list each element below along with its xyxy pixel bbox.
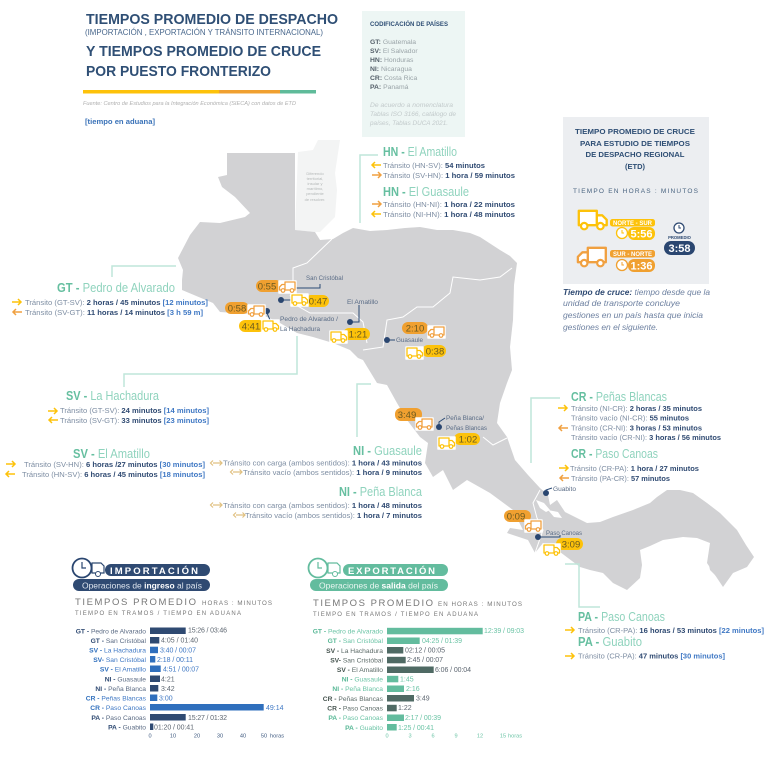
map time: 2:10: [402, 322, 445, 338]
export header: [308, 558, 448, 591]
bar chart: import: 4:51 / 00:07: [163, 666, 199, 674]
average time: PROMEDIO: [668, 235, 692, 240]
panel: regional crossing time: DE DESPACHO REGIONAL: [586, 150, 685, 159]
icon: south-north truck: [578, 248, 606, 266]
export subtitle: EN HORAS : MINUTOS: [438, 601, 522, 608]
panel: country codes: De acuerdo a nomenclatura: [370, 102, 453, 109]
bar chart: export: CR - Peñas Blancas: [323, 696, 384, 703]
disputed territory: [295, 140, 340, 232]
bar chart: import: PA - Paso Canoas: [91, 715, 147, 722]
block: HN El Amatillo: Tránsito (SV-HN): 1 hora / 59 minutos: [383, 171, 515, 180]
south-north time: 1:36: [630, 260, 653, 272]
bar chart: import: 49:14: [266, 705, 284, 712]
bar chart: export: horas: [508, 734, 522, 740]
block: SV El Amatillo: Tránsito (HN-SV): 6 horas / 45 minutos [18 minutos]: [22, 470, 205, 479]
map border post markers: Paso Canoas: [546, 530, 582, 537]
bar chart: export: 6: [431, 734, 435, 740]
block: PA Guabito: Tránsito (CR-PA): 47 minutos [30 minutos]: [578, 652, 725, 660]
bar chart: import: GT - Pedro de Alvarado: [76, 628, 146, 636]
bar chart: import: PA - Guabito: [108, 724, 146, 732]
map border post markers: Peñas Blancas: [446, 425, 487, 432]
map time: 0:38: 0:38: [426, 346, 444, 358]
block: HN El Amatillo: Tránsito (HN-SV): 54 minutos: [383, 161, 485, 170]
bar chart: import: CR - Peñas Blancas: [86, 696, 147, 702]
south-north time: [610, 250, 655, 272]
bar chart: export: 3: [408, 734, 412, 740]
import subtitle: TIEMPOS PROMEDIO: [75, 597, 196, 608]
map border post markers: Guabito: [553, 486, 576, 493]
map time: 0:47: [291, 294, 329, 308]
title: (IMPORTACIÓN , EXPORTACIÓN Y TRÁNSITO INTERNACIONAL): [85, 27, 323, 37]
bar chart: import: SV - La Hachadura: [89, 648, 146, 654]
bar chart: import: 15:26 / 03:46: [188, 628, 227, 634]
bar chart: export: 9: [454, 734, 458, 740]
bar chart: import: [76, 628, 284, 740]
disputed territory note: de resolver.: [305, 197, 325, 202]
map time: 1:02: 1:02: [459, 434, 477, 446]
block: GT Pedro de Alvarado: Tránsito (GT-SV): 2 horas / 45 minutos [12 minutos]: [25, 298, 208, 307]
block: CR Paso Canoas: CR - Paso Canoas: [571, 447, 658, 461]
disputed territory note: [305, 171, 325, 202]
disputed territory note: pendiente: [306, 191, 325, 196]
panel: country codes: países, Tablas DUCA 2021.: [369, 120, 448, 127]
icon: clock and truck: [72, 558, 104, 578]
bar chart: export: 02:12 / 00:05: [405, 648, 445, 654]
map time: 3:49: [395, 408, 433, 430]
import header: Operaciones de ingreso al país: [82, 580, 202, 590]
customs time legend: [tiempo en aduana]: [85, 117, 156, 126]
panel: regional crossing time: PARA ESTUDIO DE TIEMPOS: [580, 139, 690, 148]
panel: country codes: PA: Panamá: [370, 84, 409, 91]
bar chart: import: 3:42: [161, 686, 175, 693]
bar chart: import: 4:21: [161, 676, 175, 684]
bar chart: import: 2:18 / 00:11: [157, 657, 193, 664]
panel: country codes: CR: Costa Rica: [370, 75, 417, 82]
block: NI Peña Blanca: Tránsito vacío (ambos sentidos): 1 hora / 7 minutos: [245, 511, 422, 520]
map time: 3:09: 3:09: [562, 540, 580, 550]
block: CR Paso Canoas: Tránsito (CR-PA): 1 hora / 27 minutos: [570, 464, 699, 473]
bar chart: import: SV - El Amatillo: [100, 666, 146, 674]
crossing time definition: gestiones en un país hasta que inicia: [563, 311, 704, 320]
disputed territory note: Diferendo: [306, 171, 324, 176]
average time: [664, 223, 695, 255]
panel: country codes: CODIFICACIÓN DE PAÍSES: [370, 19, 449, 28]
land mass: [178, 153, 754, 590]
source: Fuente: Centro de Estudios para la Integración Económica (SIECA) con datos de ETD: [83, 101, 296, 107]
bar chart: import: SV- San Cristóbal: [93, 657, 147, 664]
export subtitle: [313, 598, 522, 618]
block: PA Guabito: PA - Guabito: [578, 635, 642, 649]
disputed territory note: marítimo,: [307, 186, 323, 191]
bar chart: export: 2:17 / 00:39: [405, 715, 441, 722]
block: CR Peñas Blancas: Tránsito (CR-NI): 3 horas / 53 minutos: [571, 424, 702, 432]
bar chart: export: [313, 628, 524, 740]
panel: regional crossing time: [563, 117, 709, 284]
bar chart: import: NI - Guasaule: [105, 676, 146, 684]
import header: [72, 558, 210, 591]
bar chart: export: 2:16: [406, 686, 420, 693]
export subtitle: TIEMPOS PROMEDIO: [313, 598, 433, 609]
block: CR Peñas Blancas: Tránsito (NI-CR): 2 horas / 35 minutos: [571, 404, 702, 413]
crossing time definition: [563, 288, 711, 332]
map time: 0:47: 0:47: [309, 296, 327, 308]
map time: 0:09: [504, 510, 542, 532]
block: CR Peñas Blancas: Tránsito vacío (NI-CR): 55 minutos: [571, 414, 689, 422]
bar chart: import: 50: [261, 734, 267, 740]
south-north time: SUR - NORTE: [613, 252, 652, 258]
bar chart: export: 1:22: [398, 705, 412, 712]
map border post markers: Guasaule: [396, 337, 423, 344]
panel: regional crossing time: TIEMPO EN HORAS : MINUTOS: [573, 188, 699, 195]
bar chart: export: 12: [477, 734, 483, 740]
panel: regional crossing time: (ETD): [625, 162, 645, 171]
map border post markers: [264, 275, 582, 540]
bar chart: import: 20: [194, 734, 200, 740]
block: NI Peña Blanca: [210, 485, 422, 520]
map border post markers: La Hachadura: [280, 326, 320, 333]
bar chart: export: PA - Guabito: [345, 725, 383, 732]
panel: country codes: GT: Guatemala: [370, 39, 416, 46]
block: PA Paso Canoas: Tránsito (CR-PA): 16 horas / 53 minutos [22 minutos]: [578, 626, 764, 635]
map of Central America: [178, 140, 754, 590]
block: HN El Guasaule: [372, 185, 515, 219]
block: SV La Hachadura: Tránsito (SV-GT): 33 minutos [23 minutos]: [60, 416, 209, 425]
map time: 0:58: [225, 302, 265, 317]
block: CR Peñas Blancas: [531, 390, 721, 463]
map border post markers: San Cristóbal: [306, 275, 343, 282]
map time: 1:21: [330, 328, 370, 343]
block: HN El Guasaule: Tránsito (NI-HN): 1 hora / 48 minutos: [383, 210, 515, 219]
block: GT Pedro de Alvarado: Tránsito (SV-GT): 11 horas / 14 minutos [3 h 59 m]: [25, 308, 203, 317]
title: TIEMPOS PROMEDIO DE DESPACHO: [86, 11, 338, 28]
disputed territory note: territorial,: [307, 176, 323, 181]
bar chart: import: 10: [170, 734, 176, 740]
bar chart: import: 0: [148, 734, 152, 740]
crossing time definition: Tiempo de cruce: tiempo desde que la: [563, 288, 711, 297]
block: PA Guabito: [565, 635, 725, 660]
bar chart: export: 2:45 / 00:07: [407, 657, 443, 664]
block: HN El Guasaule: Tránsito (HN-NI): 1 hora / 22 minutos: [383, 200, 515, 209]
bar chart: import: 01:20 / 00:41: [154, 724, 194, 732]
bar chart: import: 15:27 / 01:32: [188, 715, 227, 722]
bar chart: export: 15: [500, 734, 506, 740]
north-south time: 5:56: [630, 228, 653, 240]
panel: country codes: HN: Honduras: [370, 57, 414, 64]
panel: country codes: SV: El Salvador: [370, 48, 418, 55]
map time: 0:55: 0:55: [258, 282, 276, 292]
block: HN El Guasaule: HN - El Guasaule: [383, 185, 469, 199]
block: CR Peñas Blancas: CR - Peñas Blancas: [571, 390, 667, 404]
map border post markers: Pedro de Alvarado /: [280, 316, 338, 323]
bar chart: import: NI - Peña Blanca: [95, 686, 146, 693]
bar chart: export: PA - Paso Canoas: [328, 715, 384, 722]
block: PA Paso Canoas: PA - Paso Canoas: [578, 610, 665, 624]
bar chart: export: 12:39 / 09:03: [484, 628, 524, 635]
import subtitle: TIEMPO EN TRAMOS / TIEMPO EN ADUANA: [75, 611, 241, 617]
block: GT Pedro de Alvarado: [12, 266, 208, 317]
bar chart: import: 4:05 / 01:40: [161, 638, 198, 644]
import header: IMPORTACIÓN: [110, 565, 198, 577]
map time: 4:41: 4:41: [242, 322, 260, 332]
block: CR Paso Canoas: [559, 447, 699, 483]
bar chart: export: 0: [385, 734, 389, 740]
block: SV El Amatillo: SV - El Amatillo: [73, 447, 150, 461]
block: SV La Hachadura: Tránsito (GT-SV): 24 minutos [14 minutos]: [60, 406, 209, 415]
bar chart: import: 3:00: [159, 696, 173, 702]
map time: 3:09: [543, 538, 583, 556]
bar chart: import: 30: [217, 734, 223, 740]
block: HN El Amatillo: HN - El Amatillo: [383, 145, 457, 159]
map time: 2:10: 2:10: [406, 324, 424, 334]
bar chart: export: SV - La Hachadura: [326, 648, 383, 655]
map time: 1:21: 1:21: [349, 330, 367, 340]
block: NI Peña Blanca: NI - Peña Blanca: [339, 485, 422, 499]
block: PA Paso Canoas: [565, 564, 764, 635]
export header: EXPORTACIÓN: [348, 565, 435, 577]
disputed territory note: insular y: [308, 181, 322, 186]
map border post markers: El Amatillo: [347, 299, 378, 306]
bar chart: export: SV - El Amatillo: [337, 667, 383, 674]
bar chart: export: CR - Paso Canoas: [327, 706, 384, 712]
panel: regional crossing time: TIEMPO PROMEDIO DE CRUCE: [575, 127, 695, 136]
map time: 0:38: [406, 345, 446, 359]
bar chart: export: 04:25 / 01:39: [422, 638, 462, 645]
map time: 3:49: 3:49: [398, 410, 416, 421]
title: Y TIEMPOS PROMEDIO DE CRUCE: [86, 43, 321, 60]
block: NI Guasaule: Tránsito con carga (ambos sentidos): 1 hora / 43 minutos: [223, 458, 422, 468]
export subtitle: TIEMPO EN TRAMOS / TIEMPO EN ADUANA: [313, 612, 478, 618]
bar chart: import: 40: [240, 734, 246, 740]
bar chart: export: 1:25 / 00:41: [398, 725, 434, 732]
bar chart: import: GT - San Cristóbal: [91, 638, 147, 645]
map time: 1:02: [438, 433, 480, 449]
north-south time: [610, 219, 655, 240]
import subtitle: [75, 597, 272, 617]
title colour rule: [83, 90, 316, 94]
title: POR PUESTO FRONTERIZO: [86, 63, 271, 80]
bar chart: export: NI - Guasaule: [342, 676, 383, 684]
map time: 0:58: 0:58: [228, 304, 246, 314]
panel: country codes: [362, 11, 465, 137]
block: SV El Amatillo: Tránsito (SV-HN): 6 horas /27 minutos [30 minutos]: [24, 460, 205, 469]
block: SV El Amatillo: [6, 447, 205, 479]
bar chart: import: horas: [270, 734, 284, 740]
bar chart: import: 3:40 / 00:07: [160, 648, 196, 654]
bar chart: export: NI - Peña Blanca: [332, 686, 383, 693]
bar chart: export: 6:06 / 00:04: [435, 667, 471, 674]
north-south time: NORTE - SUR: [613, 221, 653, 227]
crossing time definition: unidad de transporte concluye: [563, 299, 681, 308]
bar chart: import: CR - Paso Canoas: [90, 705, 147, 712]
panel: country codes: NI: Nicaragua: [370, 66, 412, 73]
block: CR Paso Canoas: Tránsito (PA-CR): 57 minutos: [571, 474, 670, 483]
block: HN El Amatillo: [360, 145, 515, 223]
map border post markers: Peña Blanca/: [446, 415, 484, 422]
block: GT Pedro de Alvarado: GT - Pedro de Alvarado: [57, 281, 175, 295]
average time: 3:58: [668, 243, 691, 255]
block: CR Peñas Blancas: Tránsito vacío (CR-NI): 3 horas / 56 minutos: [571, 433, 721, 442]
export header: Operaciones de salida del país: [319, 580, 438, 590]
bar chart: export: SV- San Cristóbal: [330, 658, 384, 664]
block: SV La Hachadura: [48, 336, 297, 425]
bar chart: export: GT - San Cristóbal: [328, 638, 384, 645]
bar chart: export: 3:49: [416, 696, 430, 702]
import subtitle: HORAS : MINUTOS: [202, 600, 272, 607]
block: SV La Hachadura: SV - La Hachadura: [66, 389, 159, 403]
map time: 4:41: [239, 320, 279, 332]
panel: country codes: Tablas ISO 3166, catálogo de: [370, 111, 456, 118]
icon: north-south truck: [579, 211, 607, 229]
block: NI Guasaule: [210, 384, 422, 477]
block: NI Guasaule: Tránsito vacío (ambos sentidos): 1 hora / 9 minutos: [243, 468, 422, 477]
map time: 0:55: [256, 280, 296, 293]
crossing time definition: gestiones en el siguiente.: [563, 323, 658, 332]
block: NI Guasaule: NI - Guasaule: [353, 444, 422, 458]
title: [85, 11, 338, 80]
icon: clock and truck, export: [308, 558, 340, 578]
bar chart: export: GT - Pedro de Alvarado: [313, 628, 383, 636]
bar chart: export: 1:45: [400, 676, 414, 684]
block: NI Peña Blanca: Tránsito con carga (ambos sentidos): 1 hora / 48 minutos: [223, 501, 422, 510]
map time: 0:09: 0:09: [507, 512, 525, 522]
